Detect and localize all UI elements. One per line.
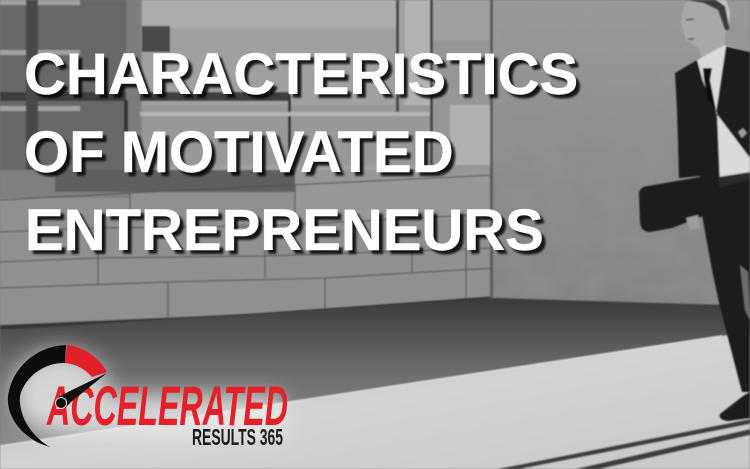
wordmark: ACCELERATED <box>46 374 288 437</box>
pavement: dark road and light ground <box>0 298 750 469</box>
tagline: RESULTS 365 <box>192 424 283 450</box>
title <box>24 42 582 267</box>
title text <box>24 42 578 263</box>
gauge needle <box>58 373 107 408</box>
man in suit with case <box>639 0 750 421</box>
jacket and legs <box>675 46 750 392</box>
logo: Accelerated Results 365 <box>8 345 288 450</box>
background photo: building facade <box>0 0 750 330</box>
title shadow: ENTREPRENEURS <box>29 202 548 267</box>
white shirt and tie <box>697 45 750 178</box>
title text: OF MOTIVATED <box>24 120 454 185</box>
instrument case <box>639 176 708 232</box>
title text: ENTREPRENEURS <box>25 198 544 263</box>
title shadow: OF MOTIVATED <box>28 124 458 189</box>
title shadow <box>28 46 582 267</box>
title text: CHARACTERISTICS <box>24 42 578 107</box>
shoe <box>720 392 750 421</box>
hand <box>686 215 700 230</box>
gauge: red arc <box>65 345 107 377</box>
needle hub <box>56 398 66 408</box>
stone wall blocks <box>0 170 496 330</box>
logo glow <box>12 350 285 437</box>
gauge: black arc <box>8 345 66 447</box>
title shadow: CHARACTERISTICS <box>28 46 582 111</box>
head and hair <box>681 0 730 58</box>
